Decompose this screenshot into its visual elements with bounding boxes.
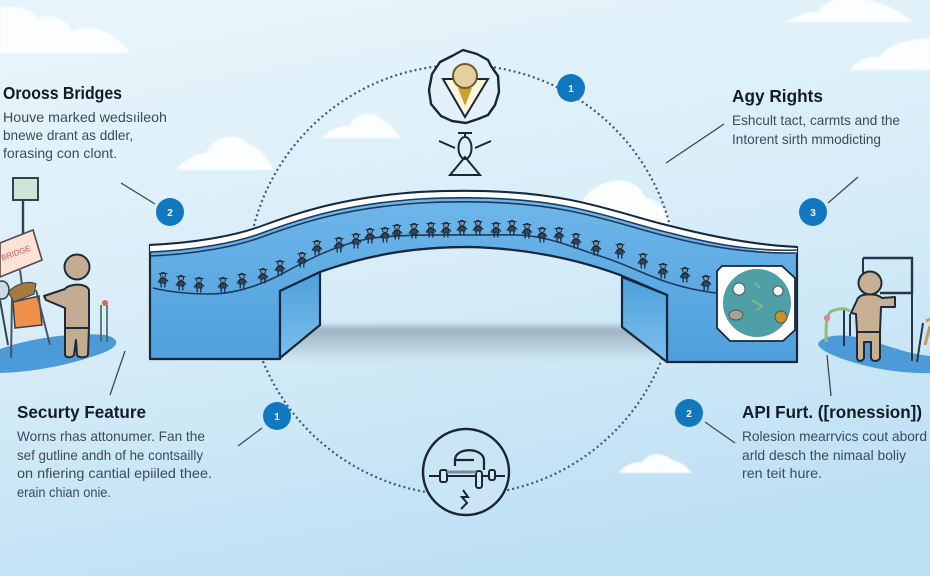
flowers <box>826 309 850 342</box>
text block: top right <box>732 86 900 147</box>
people on the walkway <box>158 220 711 292</box>
pink sign <box>0 230 42 277</box>
sign text: BRIDGE <box>0 244 32 263</box>
bridge shadow <box>268 326 672 362</box>
body text <box>742 428 927 481</box>
right presenter illustration <box>818 258 930 373</box>
body text: ren teit hure. <box>742 465 822 481</box>
body text: Intorent sirth mmodicting <box>732 131 881 147</box>
body text: sef gutline andh of he contsailly <box>17 447 203 463</box>
inset frame <box>717 266 795 341</box>
number badge 1 top <box>557 74 585 102</box>
text block: top left <box>3 83 167 161</box>
body text <box>732 112 900 147</box>
person <box>851 272 895 361</box>
icon: person with raised arms <box>439 133 491 175</box>
heading: Orooss Bridges <box>3 83 122 103</box>
body text: on nfiering cantial epiiled thee. <box>17 465 212 481</box>
number badge 2 lower right <box>675 399 703 427</box>
number badge 2 lower right: 2 <box>686 409 692 420</box>
body text <box>3 109 167 161</box>
heading: API Furt. ([ronession]) <box>742 402 922 422</box>
text block: lower right <box>742 402 927 481</box>
text block: lower left <box>17 402 212 500</box>
dotted orbit circle <box>247 65 677 495</box>
number badge 2 left: 2 <box>167 208 173 219</box>
placard pole <box>22 200 24 234</box>
heading: Agy Rights <box>732 86 823 106</box>
ground ellipse <box>0 334 116 373</box>
bridge <box>150 191 797 362</box>
number badge 1 lower left: 1 <box>274 412 280 423</box>
body text: Worns rhas attonumer. Fan the <box>17 428 205 444</box>
ground ellipse <box>818 335 930 373</box>
inset map <box>717 266 795 341</box>
board stand <box>844 258 923 362</box>
body text: Rolesion mearrvics cout abord <box>742 428 927 444</box>
badge outline <box>429 50 499 123</box>
left pier inner face <box>280 272 320 358</box>
pink flower <box>824 315 830 321</box>
number badge 1 lower left <box>263 402 291 430</box>
body text: arld desch the nimaal boliy <box>742 447 906 463</box>
leader lines <box>110 124 858 446</box>
walkway line <box>153 235 716 294</box>
orange board and easel <box>0 270 50 358</box>
board <box>863 258 912 293</box>
number badge 1 top: 1 <box>568 84 574 95</box>
heading: Securty Feature <box>17 402 146 422</box>
icon: top badge figure <box>429 50 499 123</box>
number badge 3 right: 3 <box>810 208 816 219</box>
right flowers <box>925 319 930 345</box>
flowers <box>101 300 108 342</box>
deck bands <box>150 195 797 294</box>
number badge 2 left <box>156 198 184 226</box>
teal globe <box>723 269 791 337</box>
green placard <box>13 178 38 200</box>
bridge body <box>150 191 797 362</box>
head <box>453 64 477 88</box>
body text: Eshcult tact, carmts and the <box>732 112 900 128</box>
right pier inner face <box>622 277 667 362</box>
left protester illustration <box>0 178 116 373</box>
medal <box>458 88 472 106</box>
body text: Houve marked wedsıileoh <box>3 109 167 125</box>
body text: erain chian onie. <box>17 484 111 500</box>
triangle <box>443 79 488 117</box>
person <box>44 254 90 357</box>
body text: forasing con clont. <box>3 145 117 161</box>
map animals <box>729 283 787 323</box>
body text: bnewe drant as ddler, <box>3 127 133 143</box>
number badge 3 right <box>799 198 827 226</box>
body text <box>17 428 212 500</box>
icon: bottom circle device <box>423 429 509 515</box>
